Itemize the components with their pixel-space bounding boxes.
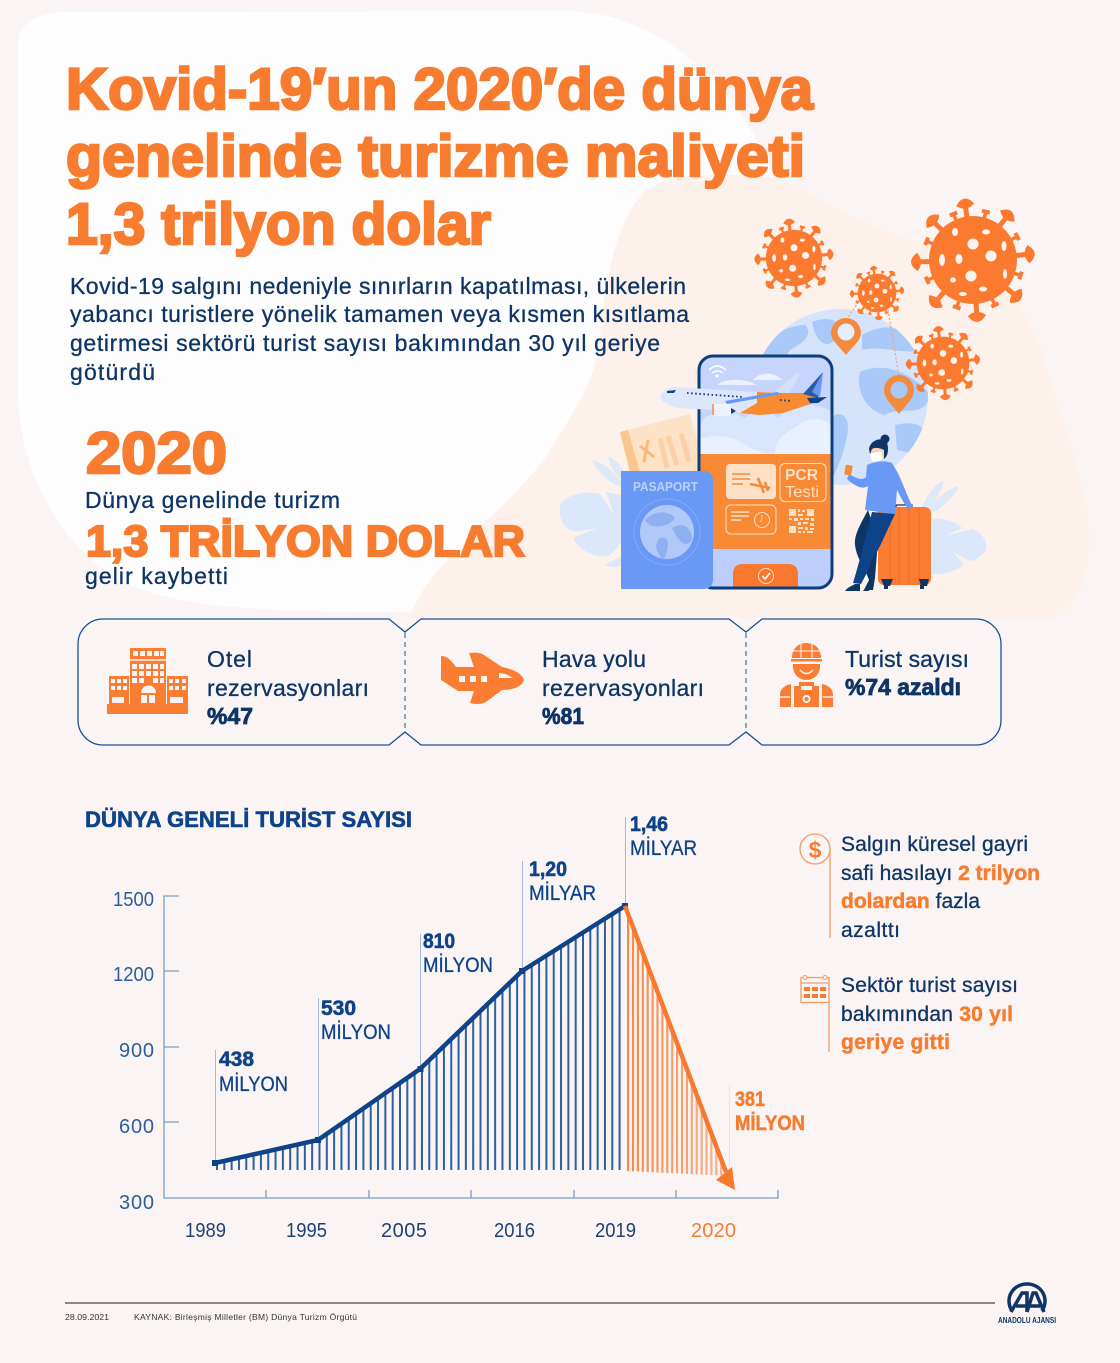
- orange hatch bars: [627, 918, 728, 1176]
- data labels: 438: [219, 1048, 254, 1071]
- title: [66, 57, 814, 257]
- y axis labels: 900: [119, 1040, 154, 1062]
- ticket: [620, 414, 728, 565]
- clouds: [699, 405, 832, 454]
- data labels: MİLYON: [423, 954, 493, 977]
- icon: tourist with camera: [780, 643, 833, 707]
- note text: dolardan fazla: [841, 890, 980, 913]
- intro text: getirmesi sektörü turist sayısı bakımından 30 yıl geriye: [70, 330, 660, 356]
- note text: geriye gitti: [841, 1031, 950, 1054]
- line chart: world tourist numbers: [113, 813, 805, 1242]
- intro text: yabancı turistlere yönelik tamamen veya kısmen kısıtlama: [70, 301, 689, 327]
- text: tourist numbers: %74 azaldı: [845, 674, 961, 700]
- y axis labels: 1200: [113, 964, 154, 986]
- intro text: [70, 273, 689, 385]
- text: hotel reservations: [207, 646, 369, 729]
- note text: safi hasılayı 2 trilyon: [841, 862, 1040, 885]
- dashed connectors: [846, 300, 899, 376]
- location pins: [831, 318, 914, 414]
- logo: Anadolu Ajansı: ANADOLU AJANSI: [998, 1316, 1056, 1325]
- traveller woman: [844, 434, 931, 591]
- amount: 1,3 TRİLYON DOLAR: [86, 517, 525, 566]
- text: airline reservations: Hava yolu: [542, 646, 646, 672]
- data labels: MİLYAR: [630, 837, 697, 860]
- data labels: 1,20: [529, 858, 567, 881]
- PCR test card: Testi: [785, 484, 819, 501]
- icon: dollar coin: $: [809, 837, 822, 863]
- legs: [855, 510, 878, 590]
- viruses: [755, 199, 1034, 400]
- note text: azalttı: [841, 919, 900, 942]
- phone: [699, 356, 832, 589]
- ticket card: [726, 464, 776, 499]
- text: airline reservations: rezervasyonları: [542, 675, 704, 701]
- text: tourist numbers: Turist sayısı: [845, 646, 969, 672]
- x axis labels: 2019: [595, 1220, 636, 1242]
- title: 1,3 trilyon dolar: [66, 192, 491, 257]
- footer: [65, 1284, 1056, 1325]
- passport: PASAPORT: [633, 480, 698, 494]
- text: hotel reservations: rezervasyonları: [207, 675, 369, 701]
- note: global GDP: [800, 833, 1040, 942]
- icon: hotel: [107, 648, 188, 714]
- note text: Salgın küresel gayri: [841, 833, 1028, 856]
- QR code: [789, 509, 814, 533]
- x axis labels: 2016: [494, 1220, 535, 1242]
- data labels: 381: [735, 1088, 765, 1111]
- intro text: Kovid-19 salgını nedeniyle sınırların kapatılması, ülkelerin: [70, 273, 686, 299]
- leaves: [560, 492, 986, 574]
- wifi symbol: [709, 366, 726, 373]
- PCR test card: [780, 464, 826, 502]
- clock card: [726, 505, 776, 534]
- date: 28.09.2021: [65, 1312, 109, 1322]
- headline stat: 2020: [85, 421, 525, 589]
- y axis labels: 1500: [113, 889, 154, 911]
- airplane: [660, 372, 827, 416]
- y axis labels: 300: [119, 1192, 154, 1214]
- data labels: [219, 813, 805, 1135]
- orange drop arrow: [625, 906, 735, 1190]
- text: airline reservations: %81: [542, 703, 584, 729]
- text: hotel reservations: %47: [207, 703, 253, 729]
- x axis labels: 1995: [286, 1220, 327, 1242]
- icon: calendar: [801, 976, 829, 1052]
- text: hotel reservations: Otel: [207, 646, 252, 672]
- note text: [841, 833, 1040, 942]
- note text: Sektör turist sayısı: [841, 974, 1018, 997]
- icon: dollar coin: [800, 834, 830, 938]
- title: Kovid-19′un 2020′de dünya: [66, 57, 814, 122]
- y axis labels: [113, 889, 154, 1214]
- data labels: MİLYON: [321, 1021, 391, 1044]
- data labels: 530: [321, 997, 356, 1020]
- x axis labels: 1989: [185, 1220, 226, 1242]
- axes and ticks: [164, 896, 778, 1198]
- data labels: MİLYON: [735, 1112, 805, 1135]
- sweater: [847, 461, 913, 514]
- logo: Anadolu Ajansı: [998, 1284, 1056, 1325]
- line: world tourism: Dünya genelinde turizm: [85, 487, 340, 513]
- year: 2020: [86, 421, 227, 486]
- title: genelinde turizme maliyeti: [66, 124, 805, 189]
- text: airline reservations: [542, 646, 704, 729]
- head: [869, 442, 887, 460]
- phone in hand: [844, 465, 853, 476]
- leaf stems: [592, 456, 958, 512]
- y axis labels: 600: [119, 1116, 154, 1138]
- PCR test card: PCR: [785, 467, 818, 484]
- illustration: travel and virus: [560, 199, 1034, 591]
- source: KAYNAK: Birleşmiş Milletler (BM) Dünya Turizm Örgütü: [134, 1312, 357, 1322]
- x axis labels: 2005: [381, 1220, 427, 1242]
- x axis labels: 2020: [691, 1220, 736, 1242]
- text: tourist numbers: [845, 646, 969, 700]
- suitcase: [878, 505, 931, 589]
- x axis labels: [185, 1220, 736, 1242]
- blue data line: [215, 906, 625, 1163]
- background blob: peach: [412, 175, 1089, 618]
- leader lines: [216, 817, 626, 1163]
- note text: [841, 974, 1018, 1054]
- background blob: white: [18, 11, 800, 612]
- data labels: MİLYON: [219, 1073, 288, 1096]
- strip outline: [78, 619, 1001, 745]
- data labels: 810: [423, 930, 455, 953]
- confirm check: [758, 568, 774, 584]
- panel: reservations and tourists strip: [78, 619, 1001, 745]
- blue hatch bars: [216, 895, 626, 1175]
- note: thirty years back: [801, 974, 1018, 1054]
- passport: [621, 471, 713, 589]
- intro text: götürdü: [70, 359, 155, 385]
- icon: airplane: [441, 653, 524, 704]
- chart heading: DÜNYA GENELİ TURİST SAYISI: [85, 807, 412, 832]
- line: lost revenue: gelir kaybetti: [85, 563, 228, 589]
- data labels: 1,46: [630, 813, 668, 836]
- globe: [763, 309, 928, 485]
- note text: bakımından 30 yıl: [841, 1003, 1013, 1026]
- data labels: MİLYAR: [529, 882, 596, 905]
